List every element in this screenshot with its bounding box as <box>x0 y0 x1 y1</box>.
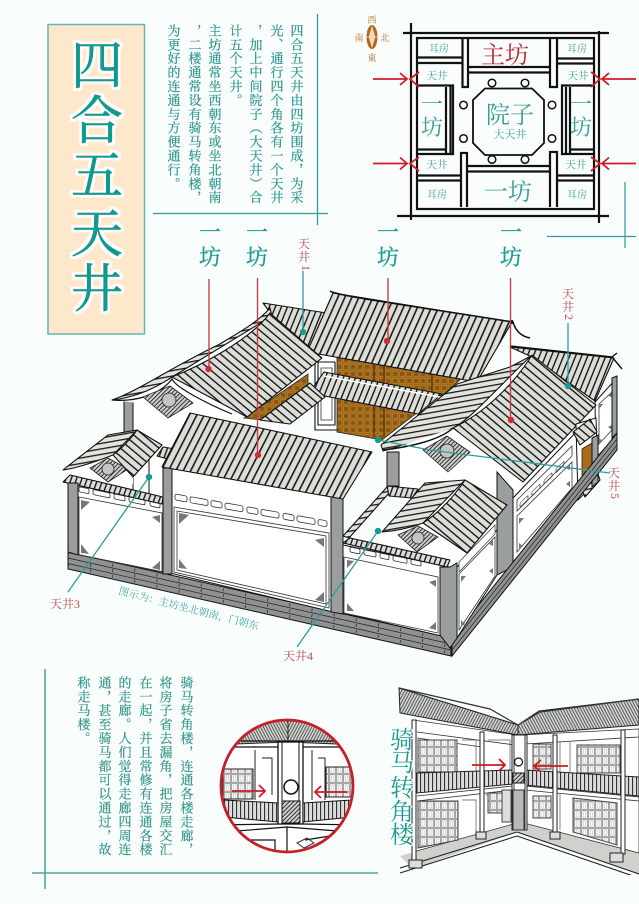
gallery title: 楼 <box>390 822 415 849</box>
leader lines teal <box>68 271 610 647</box>
label 天井1: 天 <box>298 237 310 251</box>
bottom text block: 称走马楼。 <box>76 676 90 746</box>
south-east wing back tiles <box>343 486 418 538</box>
label 天井5: 5 <box>608 493 622 499</box>
intro text block: 光、通行四个角各有一个天井 <box>268 23 284 205</box>
inner west eave <box>260 383 325 424</box>
floor plan: 耳房 <box>427 188 447 201</box>
east gable wall <box>383 428 520 570</box>
floor plan: 耳房 <box>567 42 587 55</box>
gallery title: 转 <box>390 775 414 802</box>
floor plan: 天井 <box>426 69 448 82</box>
bottom text block <box>76 675 194 857</box>
compass: 東 <box>367 52 377 63</box>
title panel: 天 <box>71 207 123 264</box>
intro text block: ，加上中间院子（大天井）合 <box>248 24 262 205</box>
west gable wall <box>118 378 250 445</box>
label 天井5: 井 <box>608 478 620 493</box>
south-west wall <box>70 484 163 572</box>
label 天井2: 井 <box>562 299 574 314</box>
corner pilaster <box>440 563 457 648</box>
intro text block: ，二楼通常设有骑马转角楼， <box>186 24 202 205</box>
bottom text block: 通，甚至骑马都可以通过，故 <box>96 676 112 857</box>
north-east wall <box>595 376 617 458</box>
main roof 主坊 <box>307 291 530 382</box>
floor plan: 一坊 <box>484 179 532 206</box>
gallery title: 马 <box>390 750 414 777</box>
label 天井1: 井 <box>298 249 310 264</box>
bottom text block: 将房子省去漏角，把房屋交汇 <box>158 675 172 857</box>
compass: 北 <box>380 32 390 43</box>
intro text block: 四合五天井由四坊围成，为采 <box>288 24 304 205</box>
east near wall <box>457 525 497 638</box>
south-west wing <box>63 447 175 500</box>
label 一坊 1: 一 <box>199 220 221 245</box>
intro text block <box>166 23 304 205</box>
floor plan: 院子 <box>486 102 534 129</box>
label 一坊 4: 坊 <box>500 245 522 270</box>
plinth east <box>452 433 617 656</box>
gallery right wing <box>517 729 639 878</box>
label 天井2 <box>562 287 576 320</box>
gallery left wing <box>400 720 517 873</box>
detail circle <box>220 718 354 854</box>
south-west tiles <box>63 475 163 504</box>
courtyard house illustration <box>63 271 622 656</box>
label 一坊 4: 一 <box>500 220 522 245</box>
gallery centre post <box>512 735 527 830</box>
north-west roof <box>263 303 333 356</box>
north-east roof <box>510 347 614 401</box>
leader lines red <box>205 278 514 458</box>
label 天井2: 2 <box>562 314 576 320</box>
east gable ornament <box>423 436 470 472</box>
south-west wing roof <box>113 430 162 477</box>
title panel: 井 <box>71 262 123 319</box>
compass: 南 <box>354 32 364 43</box>
floor plan: 耳房 <box>429 42 449 55</box>
caption: 图示为：主坊坐北朝南，门朝东 <box>117 584 261 633</box>
floor plan: 天井 <box>566 158 587 171</box>
label 一坊 2: 坊 <box>246 245 268 270</box>
title panel: 合 <box>71 94 123 151</box>
floor plan: 主坊 <box>481 42 529 69</box>
main timber facade <box>315 345 462 440</box>
plinth south <box>68 552 451 656</box>
south main wall <box>170 468 333 612</box>
label 天井1 <box>298 237 313 271</box>
floor plan: 一 <box>570 92 592 117</box>
east gate <box>573 418 600 500</box>
east long wall <box>513 430 578 562</box>
floor plan: 坊 <box>421 115 443 140</box>
label 一坊 3: 坊 <box>377 245 399 270</box>
intro text block: 主坊通常坐西朝东或坐北朝南 <box>206 24 222 205</box>
label 一坊 3 <box>377 220 399 270</box>
bottom text block: 的走廊。人们觉得走廊四周连 <box>116 676 132 857</box>
east roof <box>453 355 596 482</box>
label 一坊 2: 一 <box>246 220 268 245</box>
title panel: 四 <box>71 39 123 96</box>
east roof back slope <box>381 356 531 451</box>
gallery title: 角 <box>390 799 414 826</box>
title panel: 五 <box>71 149 123 206</box>
label 天井1: 1 <box>299 265 313 271</box>
west roof back slope <box>112 308 272 400</box>
south-east wing back slope <box>382 480 465 532</box>
floor plan: 大天井 <box>494 127 526 141</box>
compass <box>354 15 390 63</box>
title panel <box>48 24 144 334</box>
floor plan <box>373 23 636 223</box>
label 天井3: 天井3 <box>50 596 80 611</box>
south-east wall tiles <box>343 538 450 567</box>
label 一坊 1: 坊 <box>199 245 221 270</box>
label 天井4: 天井4 <box>283 648 313 663</box>
gallery arrows <box>472 759 568 772</box>
west roof <box>172 313 322 417</box>
label 天井5: 天 <box>608 466 620 480</box>
bottom text block: 骑马转角楼，连通各楼走廊， <box>178 675 194 857</box>
floor plan: 天井 <box>426 158 448 171</box>
gallery title <box>390 727 415 849</box>
floor plan: 耳房 <box>567 188 587 201</box>
lower back eave <box>309 372 442 414</box>
label 一坊 1 <box>199 220 221 270</box>
intro text block: 计五个天井。 <box>228 23 242 107</box>
south-west pilaster <box>68 483 78 555</box>
label 一坊 4 <box>500 220 522 270</box>
west wing timber <box>244 374 308 420</box>
bottom text block: 在一起，并且常修有连通各楼 <box>138 676 152 857</box>
label 天井5 <box>608 466 622 499</box>
south-east wing gable <box>350 523 467 562</box>
south-east wing roof <box>423 480 507 553</box>
gallery roofs <box>399 688 518 735</box>
floor plan: 坊 <box>570 115 592 140</box>
compass: 西 <box>367 15 377 25</box>
intro text block: 为更好的连通与方便通行。 <box>166 23 180 191</box>
label 一坊 3: 一 <box>377 220 399 245</box>
label 一坊 2 <box>246 220 268 270</box>
south-east wall <box>343 545 450 638</box>
west gable ornament <box>143 386 193 418</box>
gallery title: 骑 <box>390 727 414 754</box>
label 天井2: 天 <box>562 287 574 301</box>
south-west wing back slope <box>63 430 137 470</box>
corner gallery illustration <box>390 688 639 878</box>
circle arrows <box>232 785 347 798</box>
east pilaster <box>497 472 513 575</box>
south main roof <box>162 413 372 499</box>
floor plan: 天井 <box>568 69 589 82</box>
plan courtyard octagon <box>473 88 544 155</box>
south main pilasters <box>163 468 343 614</box>
plan arrows <box>373 72 636 171</box>
floor plan: 一 <box>421 92 443 117</box>
